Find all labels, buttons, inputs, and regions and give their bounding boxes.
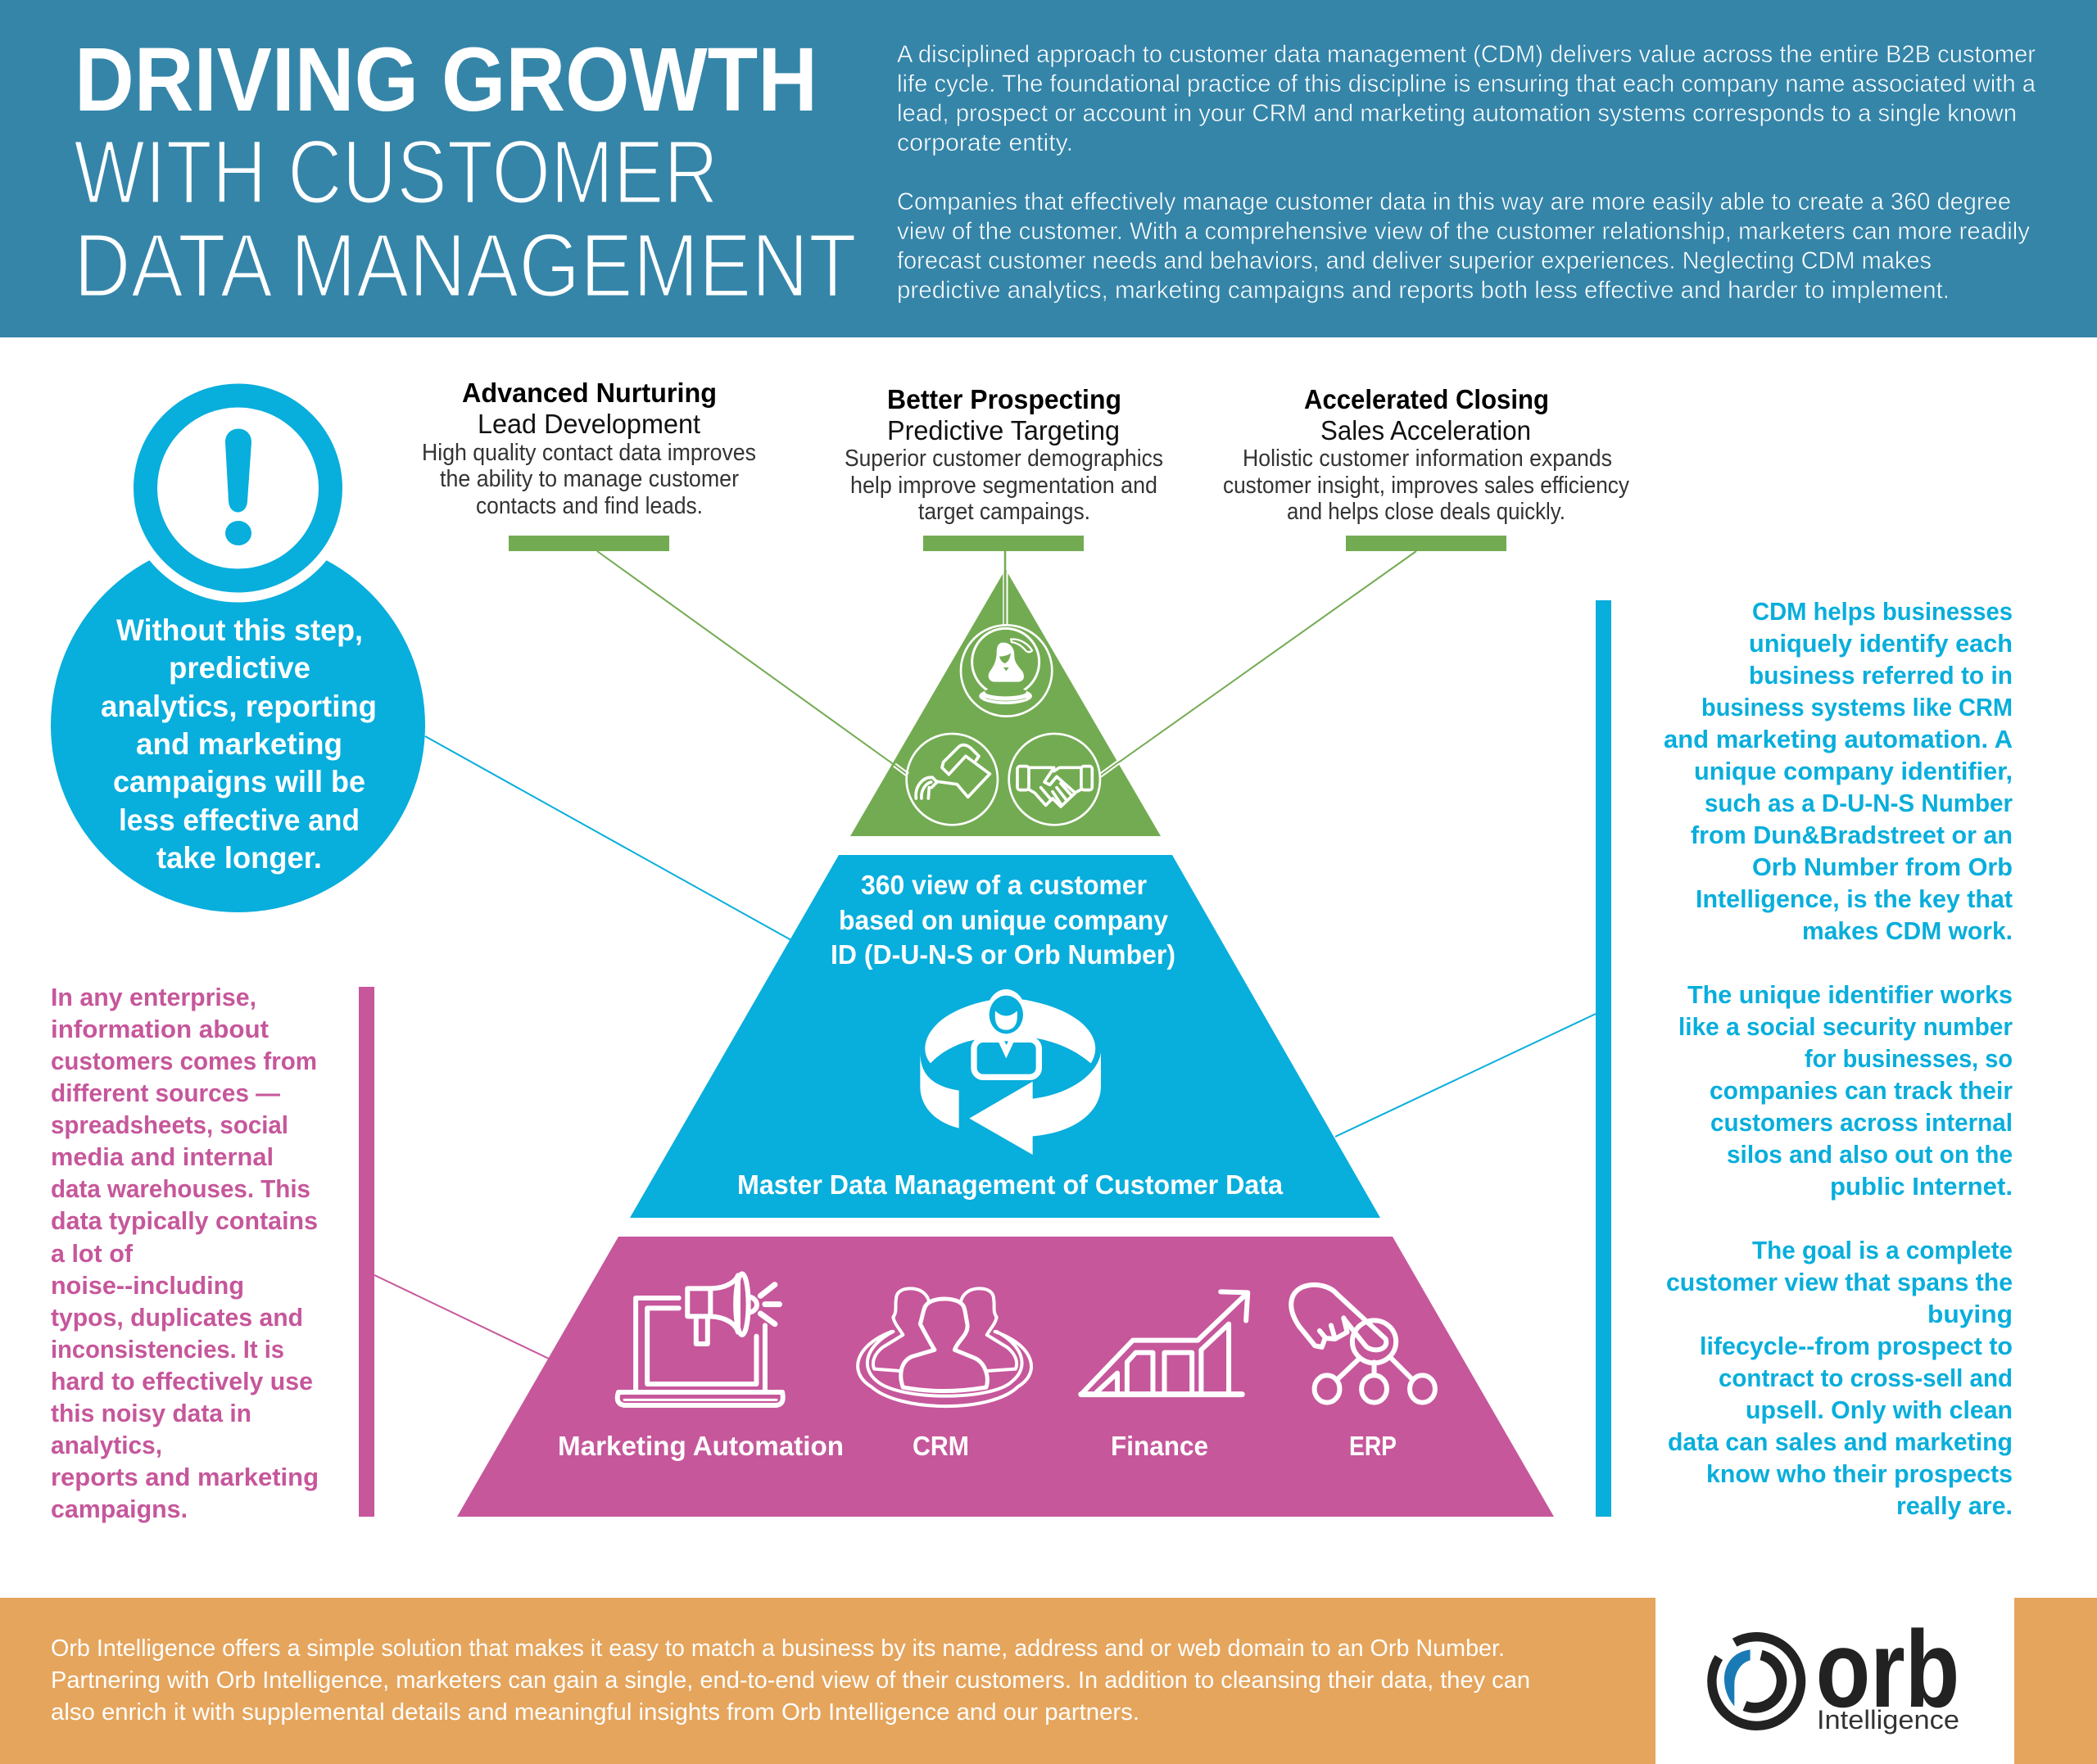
- panel: header band: [0, 0, 2097, 337]
- panel: right blue text: contract to cross-sell and: [1719, 1364, 2013, 1392]
- text block: introduction: life cycle. The foundational practice of this discipline is ensuring that each company name associated with a: [897, 70, 2036, 97]
- panel: left pink text: In any enterprise,: [51, 983, 256, 1011]
- panel: right blue text: silos and also out on the: [1727, 1140, 2013, 1169]
- text block: footer: [51, 1635, 1530, 1726]
- column: accelerated closing: Sales Acceleration: [1320, 415, 1531, 446]
- text block: introduction: Companies that effectively manage customer data in this way are more easily able to create a 360 degree: [897, 188, 2011, 215]
- panel: right blue text: data can sales and marketing: [1668, 1427, 2013, 1456]
- text block: introduction: lead, prospect or account in your CRM and marketing automation systems corresponds to a single known: [897, 100, 2017, 127]
- panel: right blue text: The goal is a complete: [1752, 1236, 2013, 1264]
- panel: left pink text: [51, 983, 319, 1523]
- panel: left pink text: information about: [51, 1015, 269, 1043]
- logo: orb intelligence: Intelligence: [1817, 1704, 1959, 1735]
- title: DATA MANAGEMENT: [74, 215, 857, 316]
- text block: warning message: and marketing: [136, 727, 342, 761]
- panel: left pink text: this noisy data in: [51, 1399, 251, 1427]
- column: better prospecting: Better Prospecting: [887, 384, 1121, 414]
- text block: introduction: predictive analytics, marketing campaigns and reports both less effective and harder to implement.: [897, 277, 1950, 304]
- panel: left pink text: customers comes from: [51, 1047, 317, 1075]
- column: accelerated closing: Holistic customer information expands: [1243, 446, 1612, 472]
- panel: right blue text: Intelligence, is the key that: [1696, 884, 2013, 913]
- text block: 360 view: [831, 870, 1175, 970]
- text block: 360 view: 360 view of a customer: [861, 870, 1147, 900]
- text block: warning message: predictive: [169, 651, 310, 685]
- panel: right blue text: for businesses, so: [1805, 1044, 2013, 1073]
- labels: systems: CRM: [913, 1431, 969, 1461]
- icon: 360 customer: [920, 989, 1101, 1155]
- panel: right blue text: know who their prospects: [1706, 1459, 2013, 1488]
- column: advanced nurturing: [422, 378, 756, 551]
- panel: right blue text: lifecycle--from prospect to: [1700, 1332, 2013, 1360]
- panel: right blue text: companies can track their: [1710, 1076, 2013, 1105]
- panel: right blue text: CDM helps businesses: [1752, 597, 2013, 626]
- title: [74, 29, 857, 316]
- panel: right blue text: unique company identifier,: [1694, 757, 2013, 785]
- panel: left pink text: analytics,: [51, 1431, 162, 1459]
- column: better prospecting: Superior customer demographics: [845, 446, 1163, 472]
- panel: left pink text: reports and marketing: [51, 1463, 319, 1491]
- labels: systems: [558, 1431, 1397, 1461]
- column: accelerated closing: and helps close deals quickly.: [1287, 499, 1565, 525]
- logo: orb intelligence: [1712, 1608, 1959, 1735]
- labels: systems: ERP: [1349, 1431, 1397, 1461]
- panel: right blue text: uniquely identify each: [1749, 629, 2013, 658]
- panel: right blue text: The unique identifier works: [1687, 980, 2013, 1009]
- icon: ERP network: [1291, 1285, 1435, 1403]
- icon: CRM people: [858, 1288, 1031, 1406]
- labels: systems: Finance: [1111, 1431, 1208, 1461]
- panel: left pink text: typos, duplicates and: [51, 1303, 303, 1332]
- panel: right blue text: makes CDM work.: [1802, 916, 2013, 945]
- panel: right blue text: buying: [1927, 1300, 2013, 1328]
- column: advanced nurturing: contacts and find leads.: [476, 493, 703, 519]
- text block: warning message: analytics, reporting: [101, 690, 377, 723]
- text block: warning message: take longer.: [156, 841, 322, 875]
- panel: left pink text: data warehouses. This: [51, 1174, 310, 1203]
- panel: right blue text: Orb Number from Orb: [1752, 853, 2013, 881]
- pyramid tier: blue middle: [630, 855, 1380, 1218]
- pyramid tier: pink base: [457, 1237, 1554, 1517]
- icon: handshake: [1009, 734, 1100, 825]
- panel: left pink text: noise--including: [51, 1271, 244, 1300]
- panel: right blue text: really are.: [1896, 1491, 2013, 1520]
- panel: left pink text: inconsistencies. It is: [51, 1335, 284, 1364]
- connector lines: [374, 551, 1596, 1359]
- column: advanced nurturing: the ability to manage customer: [440, 466, 739, 492]
- text block: warning message: campaigns will be: [113, 765, 365, 798]
- panel: right blue text: such as a D-U-N-S Number: [1705, 789, 2013, 817]
- panel: right blue text: customer view that spans the: [1666, 1268, 2013, 1296]
- icon: finance chart: [1081, 1291, 1248, 1395]
- label: master data management: Master Data Management of Customer Data: [737, 1169, 1284, 1200]
- panel: footer band: [0, 1598, 2097, 1764]
- panel: right blue text: business systems like CRM: [1701, 693, 2013, 721]
- panel: left pink text: hard to effectively use: [51, 1367, 313, 1395]
- column: better prospecting: [845, 384, 1163, 551]
- pyramid tier: green apex: [850, 551, 1161, 836]
- panel: left pink text: data typically contains: [51, 1206, 318, 1235]
- text block: 360 view: ID (D-U-N-S or Orb Number): [831, 939, 1175, 970]
- text block: warning message: [101, 613, 377, 875]
- panel: left pink text: campaigns.: [51, 1495, 188, 1523]
- text block: introduction: view of the customer. With a comprehensive view of the customer relationship, marketers can more readily: [897, 218, 2030, 245]
- callout: warning circle: [51, 373, 425, 912]
- column: advanced nurturing: Lead Development: [478, 409, 700, 439]
- panel: right blue text: customers across internal: [1710, 1108, 2013, 1137]
- icon: marketing automation: [618, 1273, 783, 1405]
- text block: introduction: [897, 41, 2036, 304]
- text block: introduction: forecast customer needs and behaviors, and deliver superior experiences. Neglecting CDM makes: [897, 247, 1932, 274]
- panel: right blue text: from Dun&Bradstreet or an: [1691, 821, 2013, 849]
- panel: right blue text: [1664, 597, 2013, 1520]
- text block: footer: Partnering with Orb Intelligence, marketers can gain a single, end-to-end view of their customers. In addition to cleansing their data, they can: [51, 1667, 1530, 1694]
- labels: systems: Marketing Automation: [558, 1431, 844, 1461]
- blue side bar: [1596, 600, 1611, 1517]
- title: DRIVING GROWTH: [75, 29, 818, 130]
- column: accelerated closing: customer insight, improves sales efficiency: [1223, 473, 1629, 499]
- text block: footer: also enrich it with supplemental details and meaningful insights from Orb Intelligence and our partners.: [51, 1699, 1139, 1726]
- panel: left pink text: media and internal: [51, 1142, 274, 1171]
- panel: left pink text: a lot of: [51, 1239, 134, 1268]
- icon: crystal ball: [961, 625, 1052, 717]
- panel: right blue text: business referred to in: [1749, 661, 2013, 690]
- column: better prospecting: target campaings.: [918, 499, 1090, 525]
- column: better prospecting: Predictive Targeting: [887, 415, 1120, 446]
- panel: left pink text: spreadsheets, social: [51, 1110, 288, 1139]
- column: accelerated closing: Accelerated Closing: [1304, 384, 1549, 414]
- text block: footer: Orb Intelligence offers a simple solution that makes it easy to match a business by its name, address and or web domain to an Orb Number.: [51, 1635, 1505, 1662]
- text block: introduction: corporate entity.: [897, 129, 1073, 156]
- panel: right blue text: upsell. Only with clean: [1746, 1395, 2013, 1424]
- text block: introduction: A disciplined approach to customer data management (CDM) delivers value across the entire B2B customer: [897, 41, 2036, 68]
- panel: right blue text: like a social security number: [1678, 1012, 2013, 1041]
- text block: 360 view: based on unique company: [839, 905, 1169, 935]
- column: advanced nurturing: High quality contact data improves: [422, 440, 756, 466]
- column: accelerated closing: [1223, 384, 1629, 551]
- text block: warning message: less effective and: [119, 803, 360, 837]
- icon: exclamation ring: [146, 396, 331, 581]
- column: advanced nurturing: Advanced Nurturing: [462, 378, 717, 408]
- logo: orb intelligence: orb: [1816, 1608, 1959, 1730]
- text block: warning message: Without this step,: [116, 613, 363, 647]
- title: WITH CUSTOMER: [74, 122, 718, 223]
- panel: right blue text: and marketing automation. A: [1664, 725, 2013, 753]
- icon: watering can: [907, 734, 998, 825]
- panel: left pink text: different sources —: [51, 1079, 280, 1107]
- panel: right blue text: public Internet.: [1830, 1172, 2013, 1201]
- pink side bar: [359, 987, 374, 1517]
- column: better prospecting: help improve segmentation and: [850, 473, 1157, 499]
